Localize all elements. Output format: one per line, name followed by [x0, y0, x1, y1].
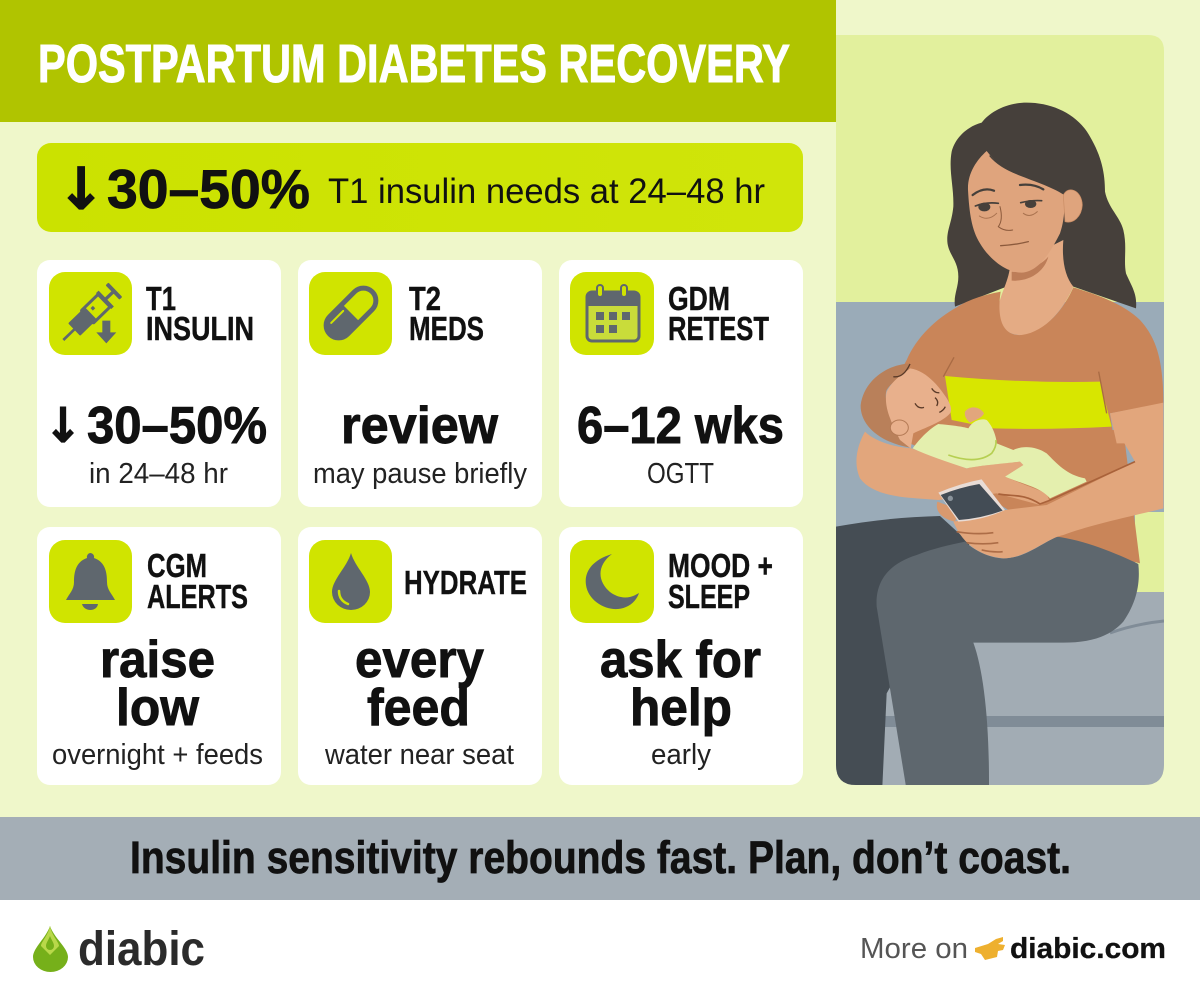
onesie seam — [948, 440, 996, 460]
far leg — [830, 516, 970, 787]
arm creases — [998, 462, 1135, 504]
value: every — [355, 631, 484, 689]
logo wordmark: diabic — [78, 923, 205, 976]
front leg — [877, 537, 1139, 787]
eyes and facial lines — [973, 156, 1043, 246]
label: SLEEP — [668, 578, 750, 615]
note: in 24–48 hr — [89, 458, 228, 490]
label — [668, 280, 769, 347]
title banner: POSTPARTUM DIABETES RECOVERY — [38, 34, 790, 94]
logo: diabic drop — [33, 926, 68, 972]
value: feed — [367, 679, 470, 737]
label — [668, 547, 773, 615]
label — [409, 280, 484, 347]
neck shadow — [1012, 257, 1048, 281]
value: ask for — [600, 631, 761, 689]
sofa — [836, 302, 1164, 785]
more on link: More on — [860, 933, 968, 965]
note: OGTT — [647, 458, 714, 490]
label — [146, 280, 254, 347]
phone screen — [941, 484, 1003, 520]
footer — [0, 900, 1200, 1000]
card: GDM retest — [559, 260, 803, 507]
onesie — [913, 419, 1087, 498]
neck — [998, 240, 1073, 335]
label: HYDRATE — [404, 564, 527, 601]
value: review — [341, 397, 499, 455]
torso — [980, 430, 1140, 563]
label: T1 — [146, 280, 176, 317]
baby ear — [890, 420, 908, 435]
pupils — [978, 200, 1036, 211]
card: T1 insulin — [37, 260, 281, 507]
illustration: tired mother holding baby and phone on sofa — [830, 35, 1164, 787]
upper arm under sleeve — [1110, 403, 1163, 443]
note: overnight + feeds — [52, 739, 263, 771]
value: 30–50% — [87, 397, 267, 455]
baby face — [886, 368, 951, 448]
fingers — [957, 532, 1003, 552]
value: 6–12 wks — [577, 397, 784, 455]
lime band on shirt — [945, 376, 1112, 429]
icon: bell — [49, 540, 132, 623]
icon: pointing hand — [975, 937, 1005, 960]
phone — [938, 479, 1005, 522]
value — [355, 631, 484, 737]
value — [100, 631, 215, 737]
icon: moon — [570, 540, 654, 623]
note: early — [651, 739, 711, 771]
label — [147, 547, 248, 615]
label: T2 — [409, 280, 441, 317]
icon: syringe — [49, 272, 132, 355]
baby fist — [965, 407, 984, 423]
headline stat bar: ↓ — [57, 155, 105, 223]
title banner — [0, 0, 836, 122]
ear — [1063, 190, 1082, 222]
more on link — [860, 933, 1166, 965]
baby-holding arm — [856, 432, 1049, 505]
supporting arm — [953, 427, 1163, 558]
value: raise — [100, 631, 215, 689]
more on link: diabic.com — [1010, 933, 1166, 965]
card: CGM alerts — [37, 527, 281, 785]
card: hydrate — [298, 527, 542, 785]
shirt folds — [943, 357, 1107, 413]
face — [968, 151, 1064, 273]
baby eyes, nose and brows — [893, 364, 945, 412]
label: RETEST — [668, 310, 769, 347]
value: help — [630, 679, 732, 737]
phone camera — [948, 496, 953, 501]
headline stat bar: T1 insulin needs at 24–48 hr — [328, 172, 765, 211]
card: mood and sleep — [559, 527, 803, 785]
value: ↓ — [44, 399, 82, 454]
note: water near seat — [324, 739, 514, 771]
takeaway band — [0, 817, 1200, 900]
label: CGM — [147, 547, 207, 584]
label: GDM — [668, 280, 730, 317]
note: may pause briefly — [313, 458, 527, 490]
value — [600, 631, 761, 737]
card: T2 meds — [298, 260, 542, 507]
headline stat bar — [37, 143, 803, 232]
label: MOOD + — [668, 547, 773, 584]
value: low — [116, 679, 200, 737]
headline stat bar: 30–50% — [107, 158, 310, 220]
icon: calendar — [570, 272, 654, 355]
baby hair — [861, 363, 912, 448]
label: MEDS — [409, 310, 484, 347]
icon: capsule — [309, 272, 392, 355]
icon: water drop — [309, 540, 392, 623]
shirt upper — [904, 287, 1164, 468]
takeaway band: Insulin sensitivity rebounds fast. Plan, don’t coast. — [130, 832, 1071, 883]
hand under phone — [936, 502, 956, 522]
hair — [947, 103, 1136, 308]
label: INSULIN — [146, 310, 254, 347]
label: ALERTS — [147, 578, 248, 615]
